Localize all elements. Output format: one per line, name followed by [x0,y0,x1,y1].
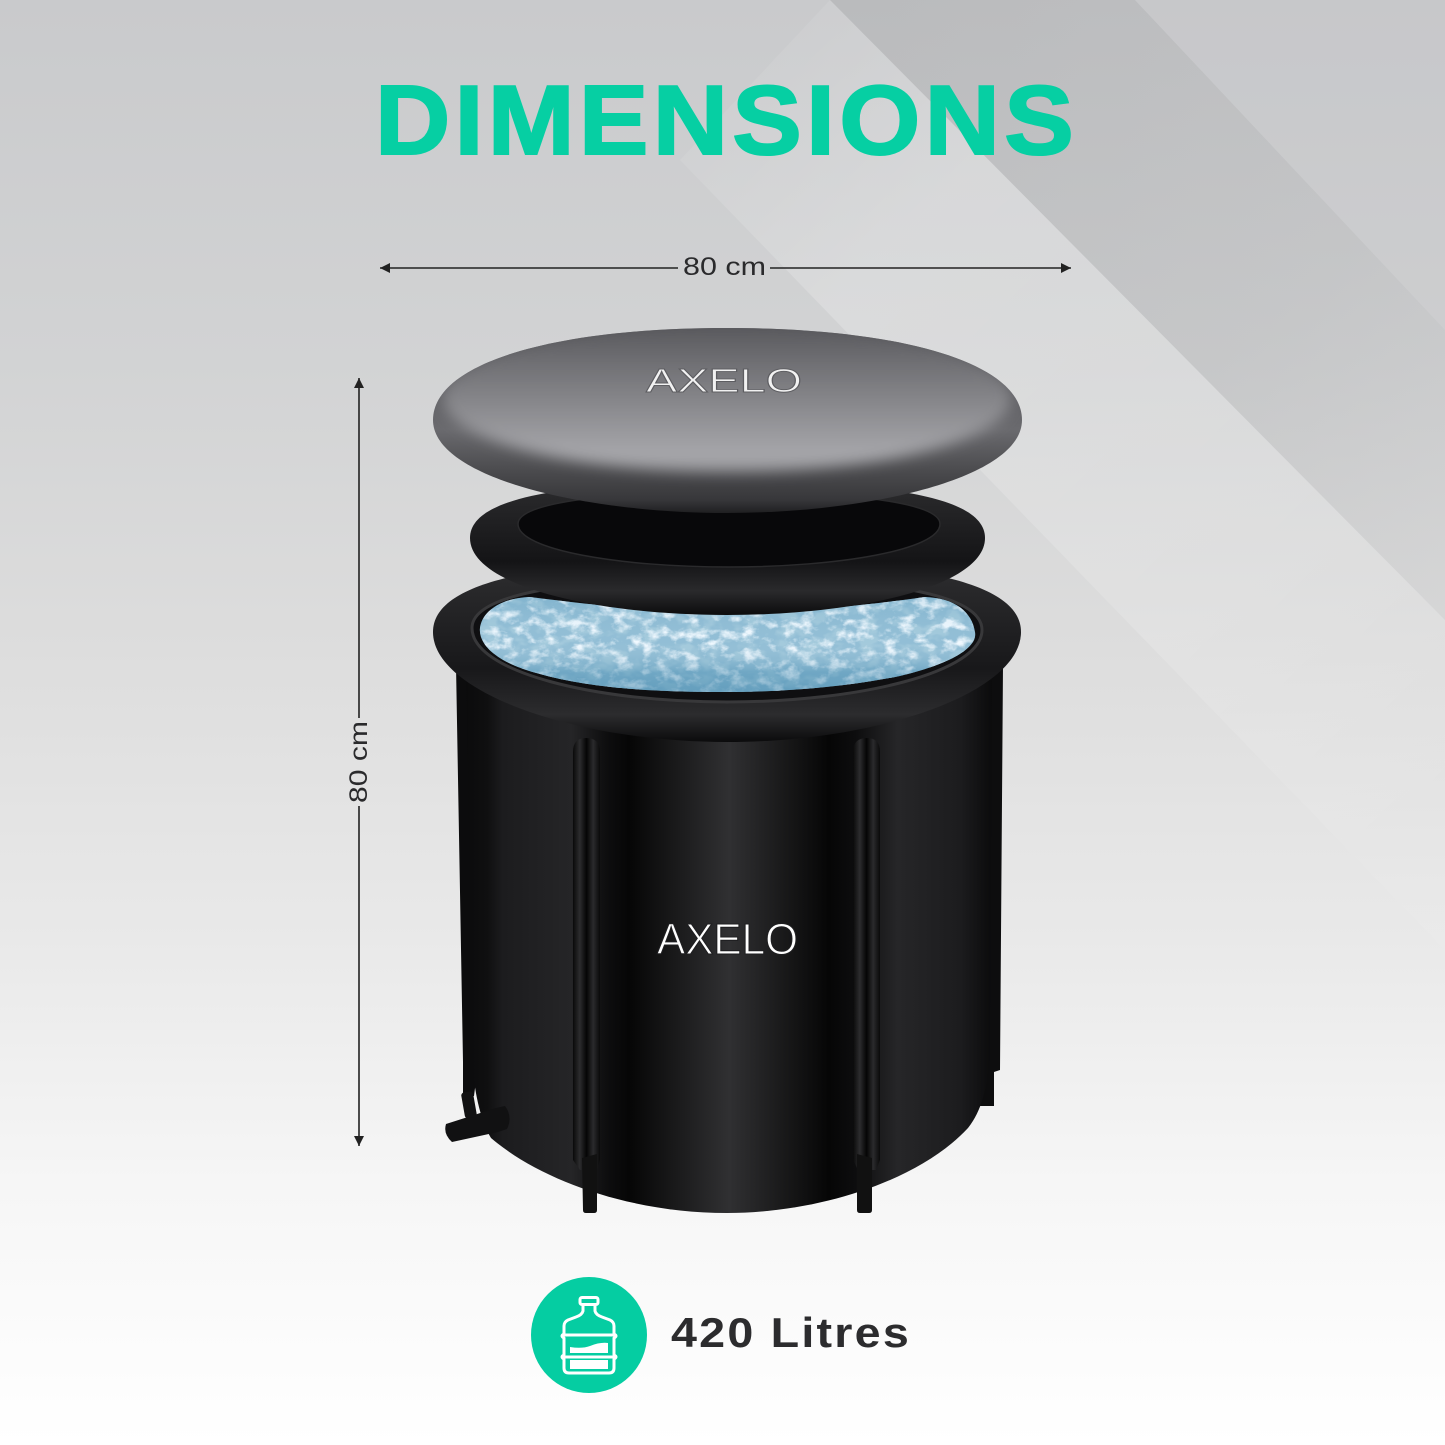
height dimension: 80 cm: 80 cm [345,721,373,803]
body logo: AXELO [657,915,798,964]
drain tap [445,1091,510,1142]
tub rim [433,560,1021,742]
tub body [466,680,992,1213]
body struts [573,738,880,1213]
width dimension: 80 cm [380,253,1071,281]
title: DIMENSIONS [375,65,1078,175]
capacity icon: water bottle [531,1277,647,1393]
width dimension: 80 cm: 80 cm [683,253,766,281]
lid logo: AXELO [646,362,802,399]
tub side legs [456,665,1003,1106]
product: ice bath tub [433,324,1022,1213]
height dimension: 80 cm [345,378,373,1146]
capacity label: 420 Litres [671,1309,911,1356]
lid [433,324,1022,513]
middle ring [470,482,985,615]
crushed ice [480,597,976,692]
